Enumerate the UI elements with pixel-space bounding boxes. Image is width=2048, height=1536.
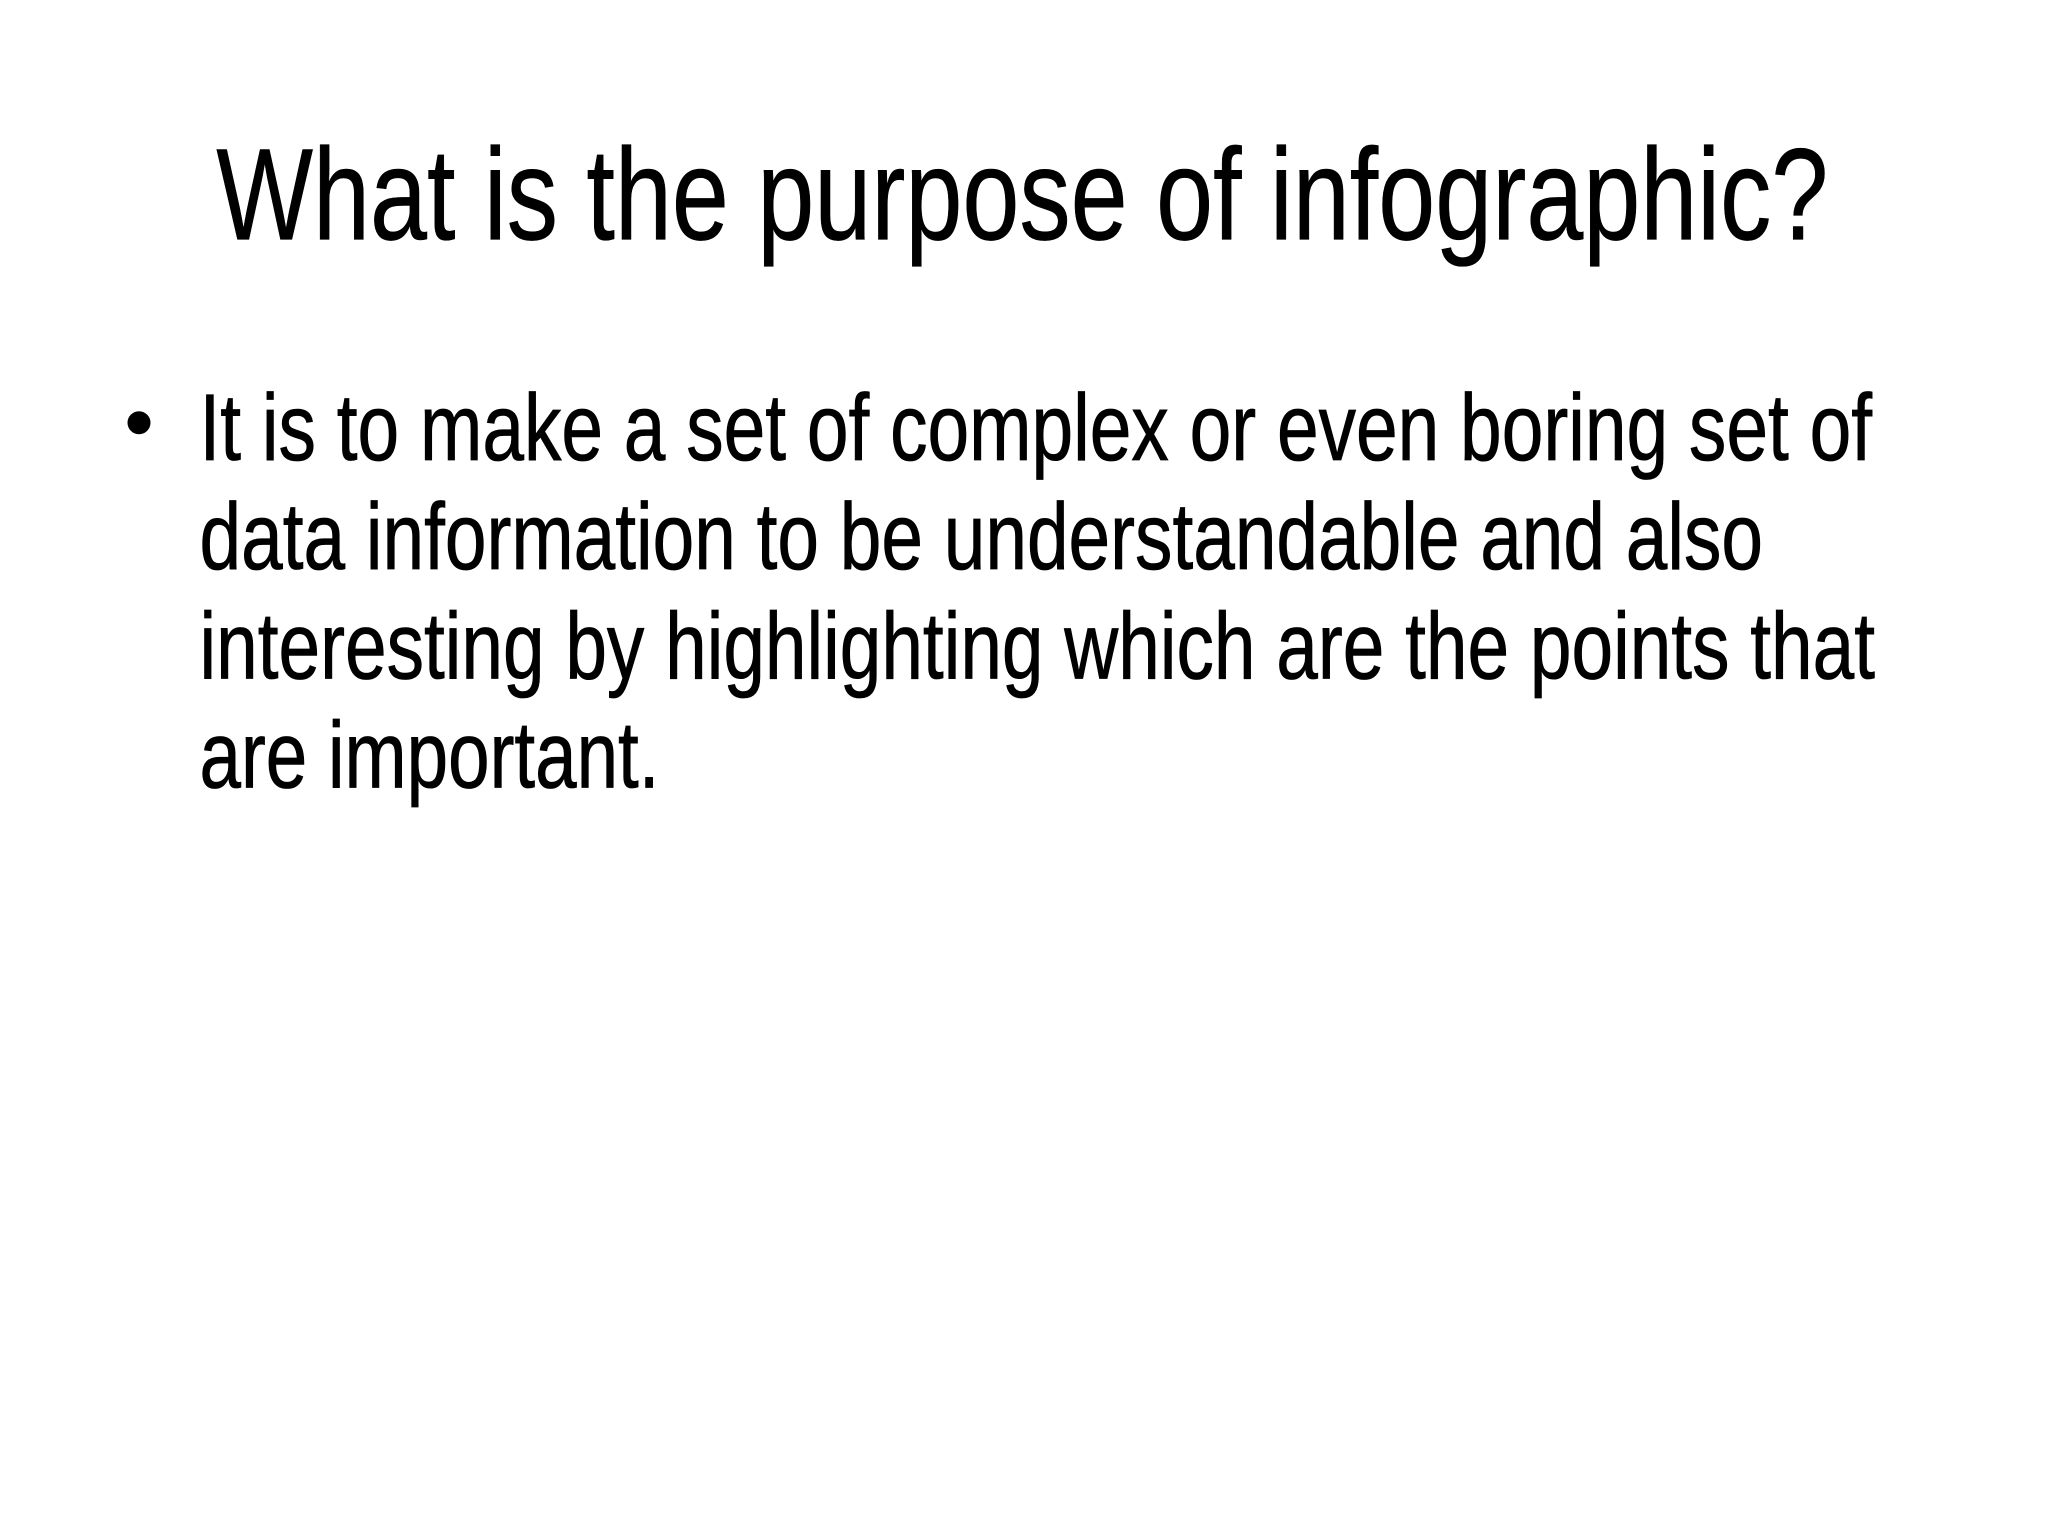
body text: are important. [200, 702, 660, 808]
body text [200, 375, 1875, 808]
icon: bullet [128, 411, 150, 434]
bullet list [128, 375, 1875, 808]
